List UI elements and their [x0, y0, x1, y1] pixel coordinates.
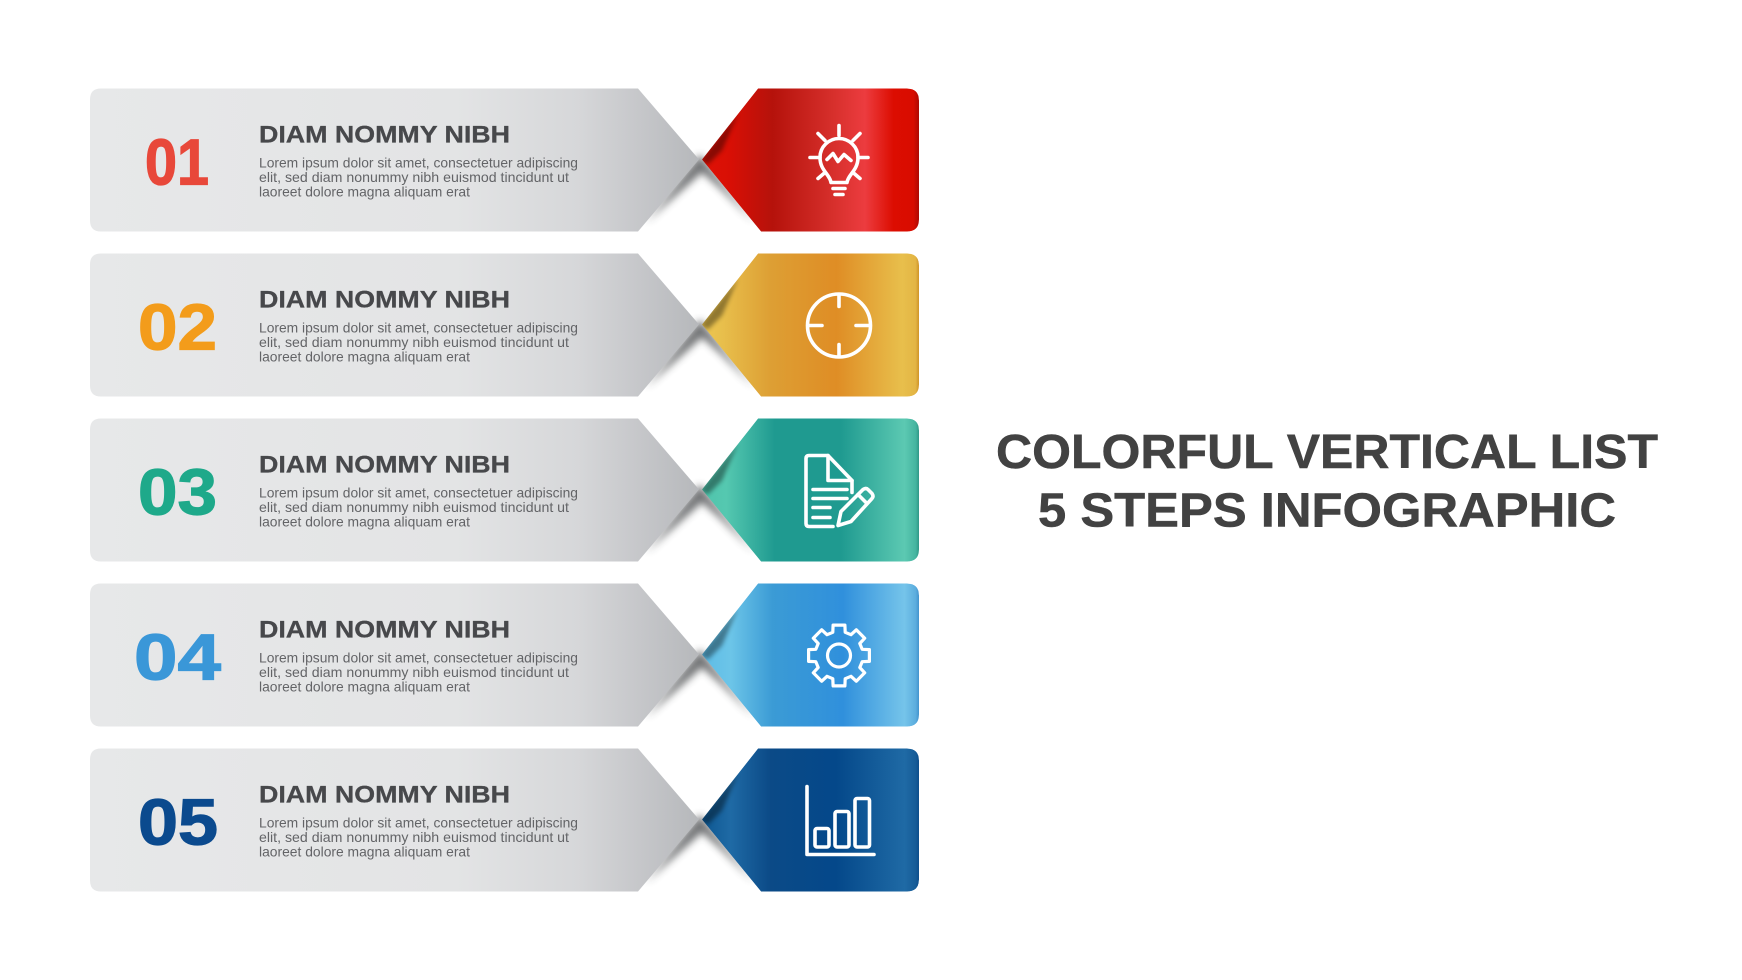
body text: laoreet dolore magna aliquam erat	[259, 844, 470, 860]
number: 05	[138, 786, 218, 858]
row 4	[90, 584, 919, 726]
coloured tab	[700, 418, 919, 562]
body text: Lorem ipsum dolor sit amet, consectetuer adipiscing	[259, 650, 578, 666]
coloured tab	[700, 254, 919, 396]
row 2	[90, 254, 919, 396]
fold shadow	[646, 320, 754, 388]
grey label panel	[90, 584, 699, 726]
row 1	[90, 88, 919, 232]
heading: DIAM NOMMY NIBH	[259, 452, 510, 478]
body text: elit, sed diam nonummy nibh euismod tincidunt ut	[259, 500, 569, 515]
title: 5 STEPS INFOGRAPHIC	[1038, 484, 1616, 538]
body text: laoreet dolore magna aliquam erat	[259, 680, 470, 694]
coloured tab	[700, 584, 919, 726]
title	[996, 426, 1658, 538]
row 5	[90, 748, 919, 892]
number: 02	[138, 290, 217, 364]
grey label panel	[90, 254, 699, 396]
icon: light bulb	[810, 126, 868, 194]
grey label panel	[90, 418, 699, 562]
fold shadow	[646, 650, 754, 718]
heading: DIAM NOMMY NIBH	[259, 122, 510, 148]
body text: laoreet dolore magna aliquam erat	[259, 350, 470, 364]
body text: Lorem ipsum dolor sit amet, consectetuer adipiscing	[259, 816, 578, 830]
body text: Lorem ipsum dolor sit amet, consectetuer adipiscing	[259, 320, 578, 336]
body text: laoreet dolore magna aliquam erat	[259, 184, 470, 200]
heading: DIAM NOMMY NIBH	[259, 616, 510, 644]
icon: document and pencil	[806, 456, 873, 526]
title: COLORFUL VERTICAL LIST	[996, 426, 1658, 479]
fold shadow	[646, 814, 754, 882]
fold shadow	[646, 484, 754, 552]
fold shadow	[646, 154, 754, 222]
grey label panel	[90, 748, 699, 892]
coloured tab	[700, 748, 919, 892]
number: 03	[138, 456, 217, 528]
icon: gear	[809, 625, 869, 686]
body text: Lorem ipsum dolor sit amet, consectetuer adipiscing	[259, 156, 578, 170]
grey label panel	[90, 88, 699, 232]
body text: elit, sed diam nonummy nibh euismod tincidunt ut	[259, 170, 569, 185]
body text: elit, sed diam nonummy nibh euismod tincidunt ut	[259, 335, 569, 350]
row 3	[90, 418, 919, 562]
number: 04	[134, 620, 221, 694]
body text: laoreet dolore magna aliquam erat	[259, 514, 470, 530]
icon: target	[808, 294, 870, 357]
heading: DIAM NOMMY NIBH	[259, 286, 510, 314]
heading: DIAM NOMMY NIBH	[259, 782, 510, 808]
body text: elit, sed diam nonummy nibh euismod tincidunt ut	[259, 830, 569, 845]
icon: bar chart	[807, 786, 874, 854]
body text: elit, sed diam nonummy nibh euismod tincidunt ut	[259, 665, 569, 680]
coloured tab	[700, 88, 919, 232]
body text: Lorem ipsum dolor sit amet, consectetuer adipiscing	[259, 486, 578, 500]
number: 01	[145, 126, 209, 198]
